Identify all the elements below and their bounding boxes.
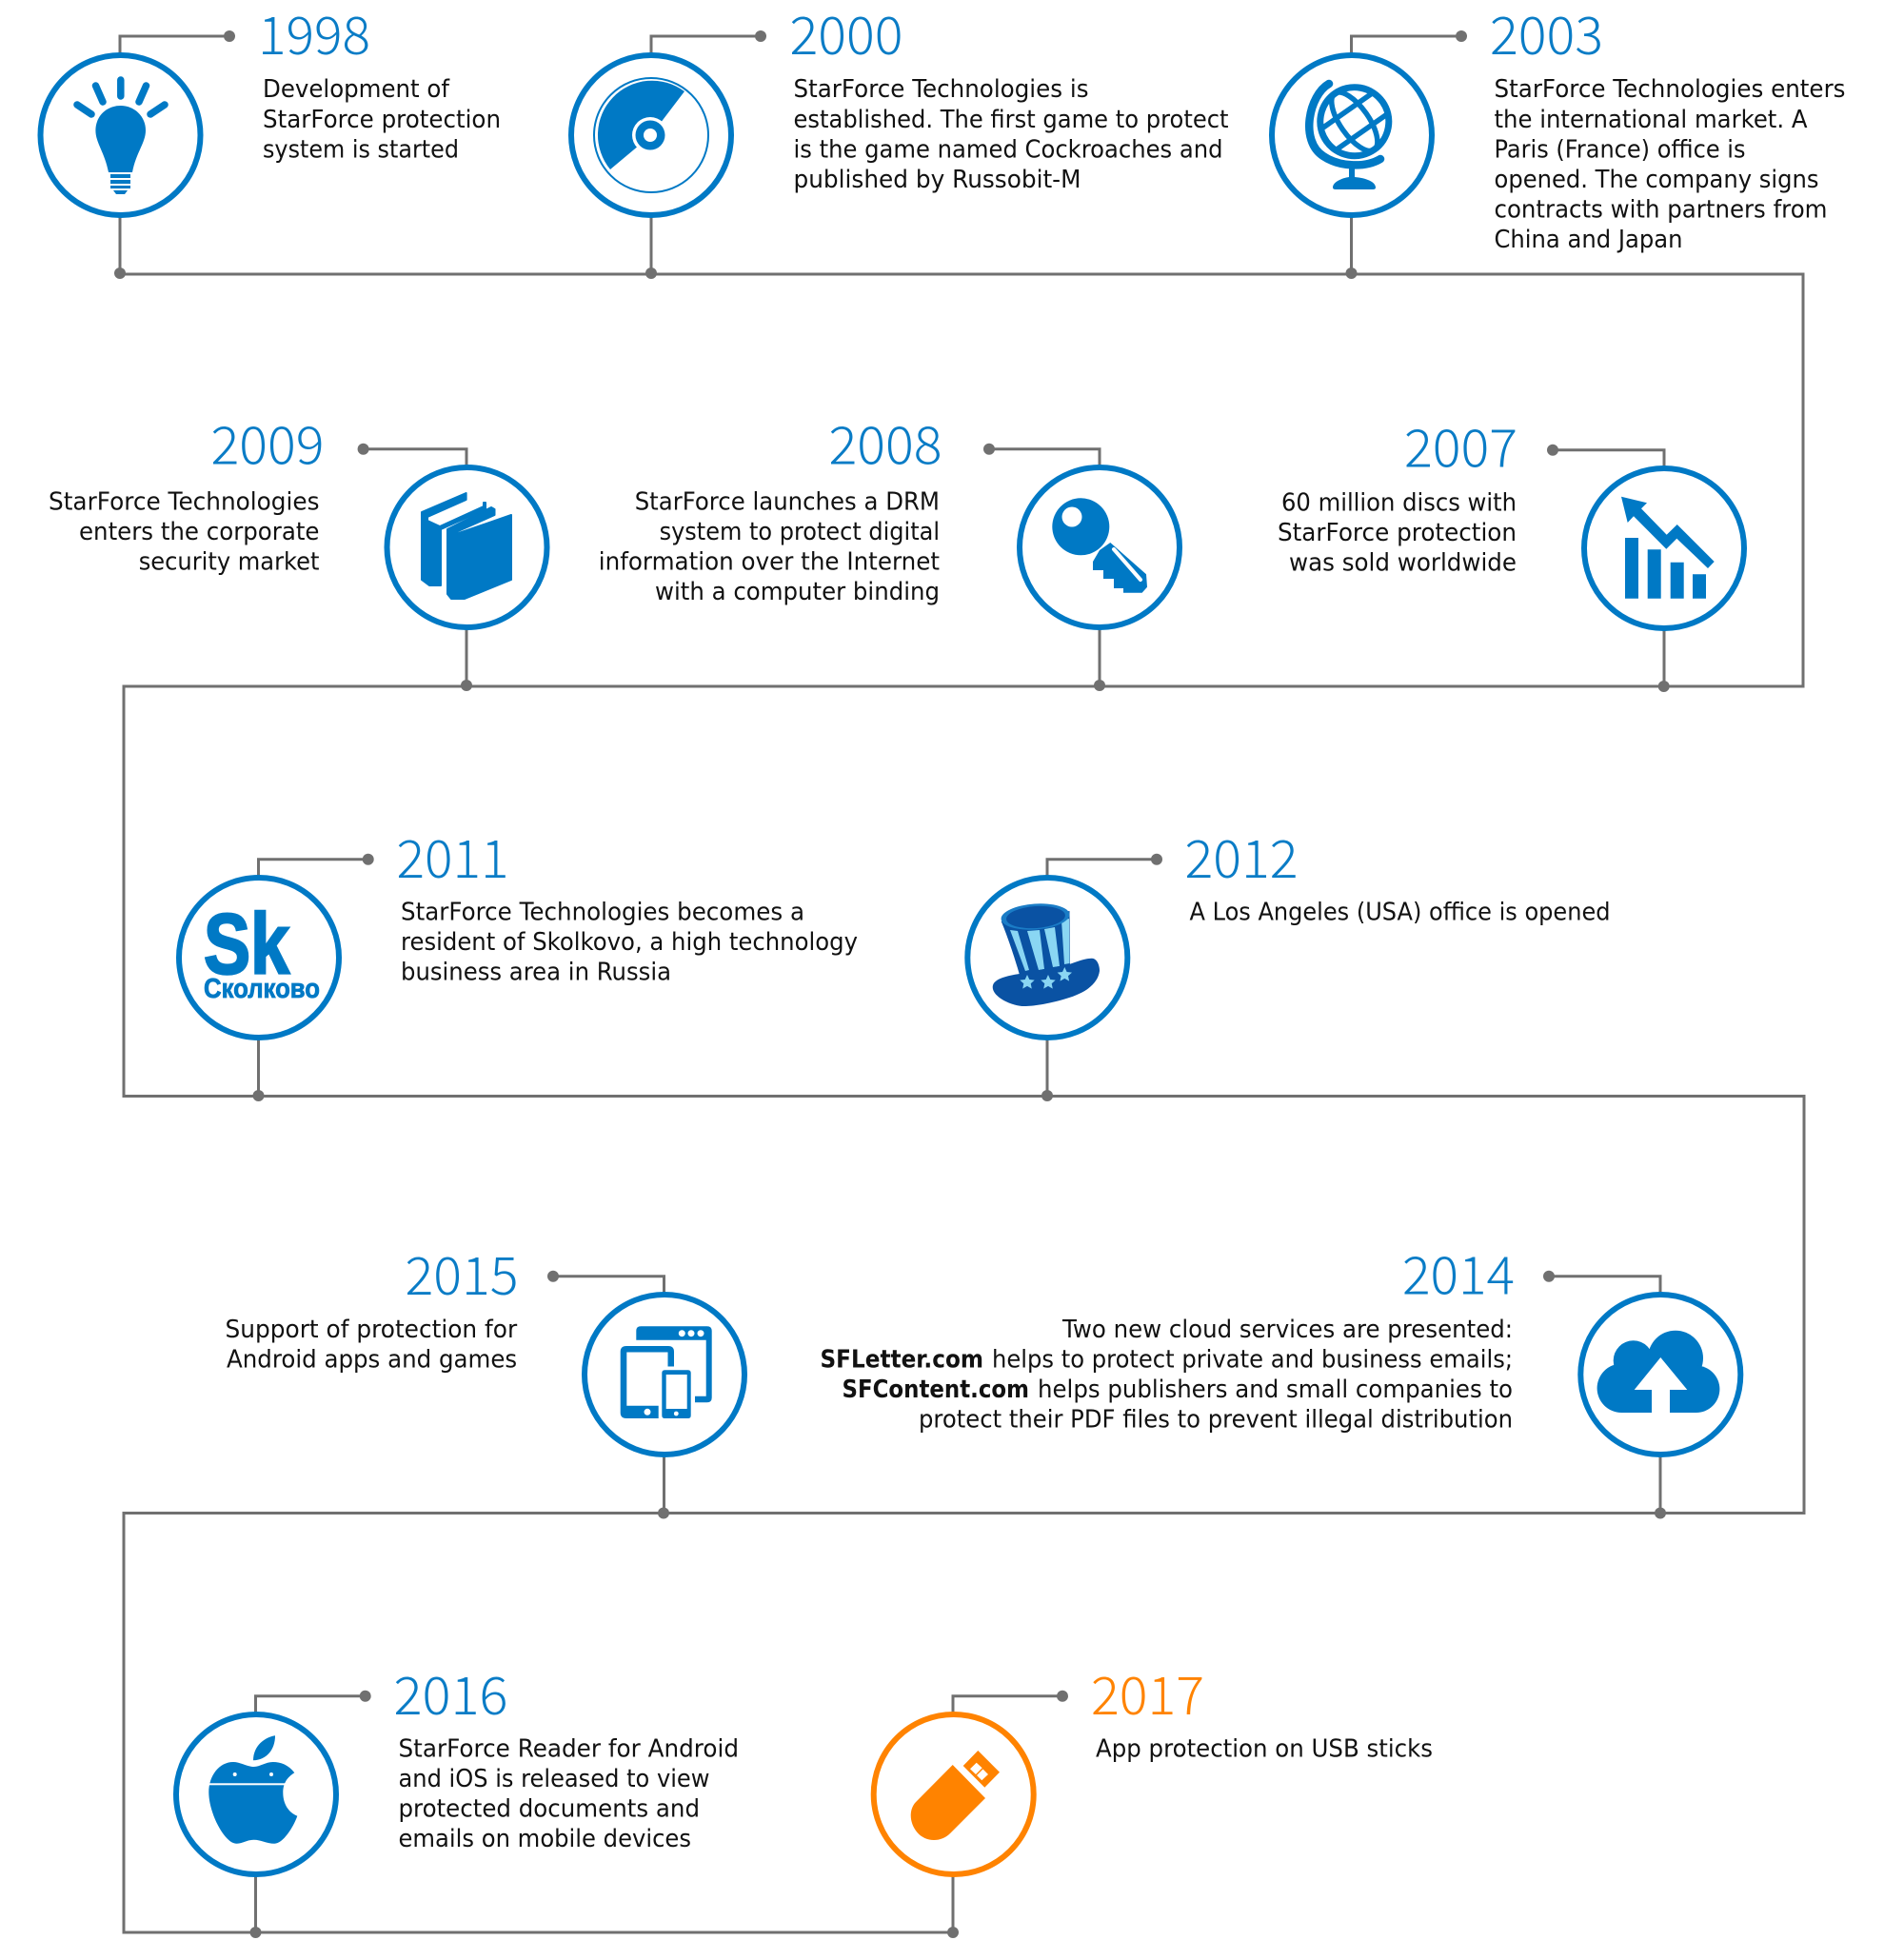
text: 2008 description: StarForce launches a DRM (635, 487, 940, 516)
milestone: 1998 (40, 0, 501, 279)
text: 2003 description: the international market. A (1495, 106, 1808, 134)
milestone: 2016: 2016 (394, 1653, 508, 1730)
text: 2009 description: security market (139, 548, 320, 577)
milestone: 2011: 2011 (396, 817, 508, 893)
text: 2014 description: SFContent.com (842, 1376, 1029, 1404)
text: 2008 description: with a computer binding (655, 578, 940, 606)
milestone: 2015: 2015 (406, 1234, 518, 1310)
icon: Skolkovo logo: Сколково (204, 974, 320, 1004)
text: 1998 description: StarForce protection (263, 106, 501, 134)
text: 2000 description: established. The first game to protect (794, 106, 1228, 134)
text: 2014 description: helps to protect private and business emails; (992, 1346, 1513, 1375)
text: 2008 description (599, 487, 940, 606)
milestone: 2014: 2014 (1402, 1234, 1515, 1310)
milestone: 2009: 2009 (211, 404, 324, 480)
text: 2007 description: 60 million discs with (1281, 489, 1517, 518)
text: 2011 description (401, 899, 858, 986)
milestone: 2009 (49, 404, 546, 691)
milestone: 2000 (571, 0, 1228, 279)
text: 2014 description: Two new cloud services are presented: (1061, 1316, 1513, 1344)
icon: USB stick (911, 1751, 1000, 1840)
text: 2000 description: is the game named Cockroaches and (794, 135, 1222, 164)
milestone: 2011 (179, 817, 858, 1101)
text: 2009 description: enters the corporate (79, 518, 320, 546)
text: 2016 description: StarForce Reader for Android (398, 1734, 739, 1763)
icon: compact disc (594, 78, 708, 192)
text: 2016 description: protected documents and (398, 1795, 700, 1824)
text: 2008 description: system to protect digital (660, 518, 940, 546)
milestone: 2012: 2012 (1184, 817, 1299, 893)
icon: falling chart (1621, 497, 1715, 599)
icon: cloud upload (1597, 1331, 1719, 1414)
text: 2011 description: resident of Skolkovo, a high technology (401, 928, 858, 957)
milestone: 2015 (225, 1234, 744, 1519)
text: 2003 description: Paris (France) office is (1495, 135, 1746, 164)
text: 2007 description: was sold worldwide (1289, 548, 1517, 577)
text: 2003 description (1495, 75, 1845, 254)
milestone: 2008: 2008 (828, 404, 942, 480)
icon: devices (621, 1326, 712, 1418)
text: 2009 description (49, 487, 320, 577)
text: 2009 description: StarForce Technologies (49, 487, 320, 516)
text: 2000 description (794, 75, 1228, 194)
icon: key (1052, 498, 1147, 593)
text: 2008 description: information over the Internet (599, 548, 940, 577)
text: 1998 description: system is started (263, 135, 459, 164)
icon: top hat (993, 901, 1100, 1006)
text: 2012 description: A Los Angeles (USA) office is opened (1190, 899, 1611, 927)
text: 2003 description: China and Japan (1495, 226, 1683, 254)
milestone: 2008 (599, 404, 1180, 691)
milestone: 2007 (1278, 406, 1744, 692)
milestone: 2003 (1272, 0, 1845, 279)
text: 2011 description: StarForce Technologies becomes a (401, 899, 804, 927)
text: 1998 description (263, 75, 501, 164)
icon: apple (208, 1735, 297, 1844)
text: 2007 description (1278, 489, 1517, 577)
milestone: 2017: 2017 (1091, 1653, 1204, 1730)
milestone: 2016 (176, 1653, 739, 1938)
milestone: 2014 (821, 1234, 1740, 1519)
text: 2015 description: Support of protection for (225, 1316, 517, 1344)
text: 2003 description: opened. The company signs (1495, 166, 1818, 194)
text: 2011 description: business area in Russia (401, 958, 671, 986)
text: 2000 description: published by Russobit-M (794, 166, 1081, 194)
text: 2017 description: App protection on USB sticks (1096, 1734, 1433, 1763)
text: 2003 description: contracts with partners from (1495, 196, 1828, 225)
text: 2014 description (821, 1316, 1513, 1434)
text: 2014 description: SFLetter.com (821, 1346, 983, 1375)
text: 2016 description (398, 1734, 739, 1853)
milestone: 2007: 2007 (1404, 406, 1517, 482)
text: 2016 description: emails on mobile devices (398, 1825, 691, 1853)
text: 2014 description: helps publishers and small companies to (1038, 1376, 1513, 1404)
text: 2014 description: protect their PDF files to prevent illegal distribution (919, 1405, 1513, 1434)
icon: light bulb (77, 80, 165, 194)
icon: globe (1307, 74, 1402, 189)
text: 2015 description (225, 1316, 517, 1375)
icon: Skolkovo logo: Sk (204, 897, 290, 992)
milestone: 2017 (874, 1653, 1433, 1938)
icon: books (422, 493, 511, 599)
text: 2000 description: StarForce Technologies is (794, 75, 1089, 104)
text: 2003 description: StarForce Technologies enters (1495, 75, 1845, 104)
milestone: 2012 (967, 817, 1611, 1101)
text: 1998 description: Development of (263, 75, 450, 104)
text: 2016 description: and iOS is released to view (398, 1765, 710, 1793)
text: 2007 description: StarForce protection (1278, 519, 1517, 547)
timeline connector (120, 274, 1804, 1932)
text: 2015 description: Android apps and games (227, 1346, 517, 1375)
